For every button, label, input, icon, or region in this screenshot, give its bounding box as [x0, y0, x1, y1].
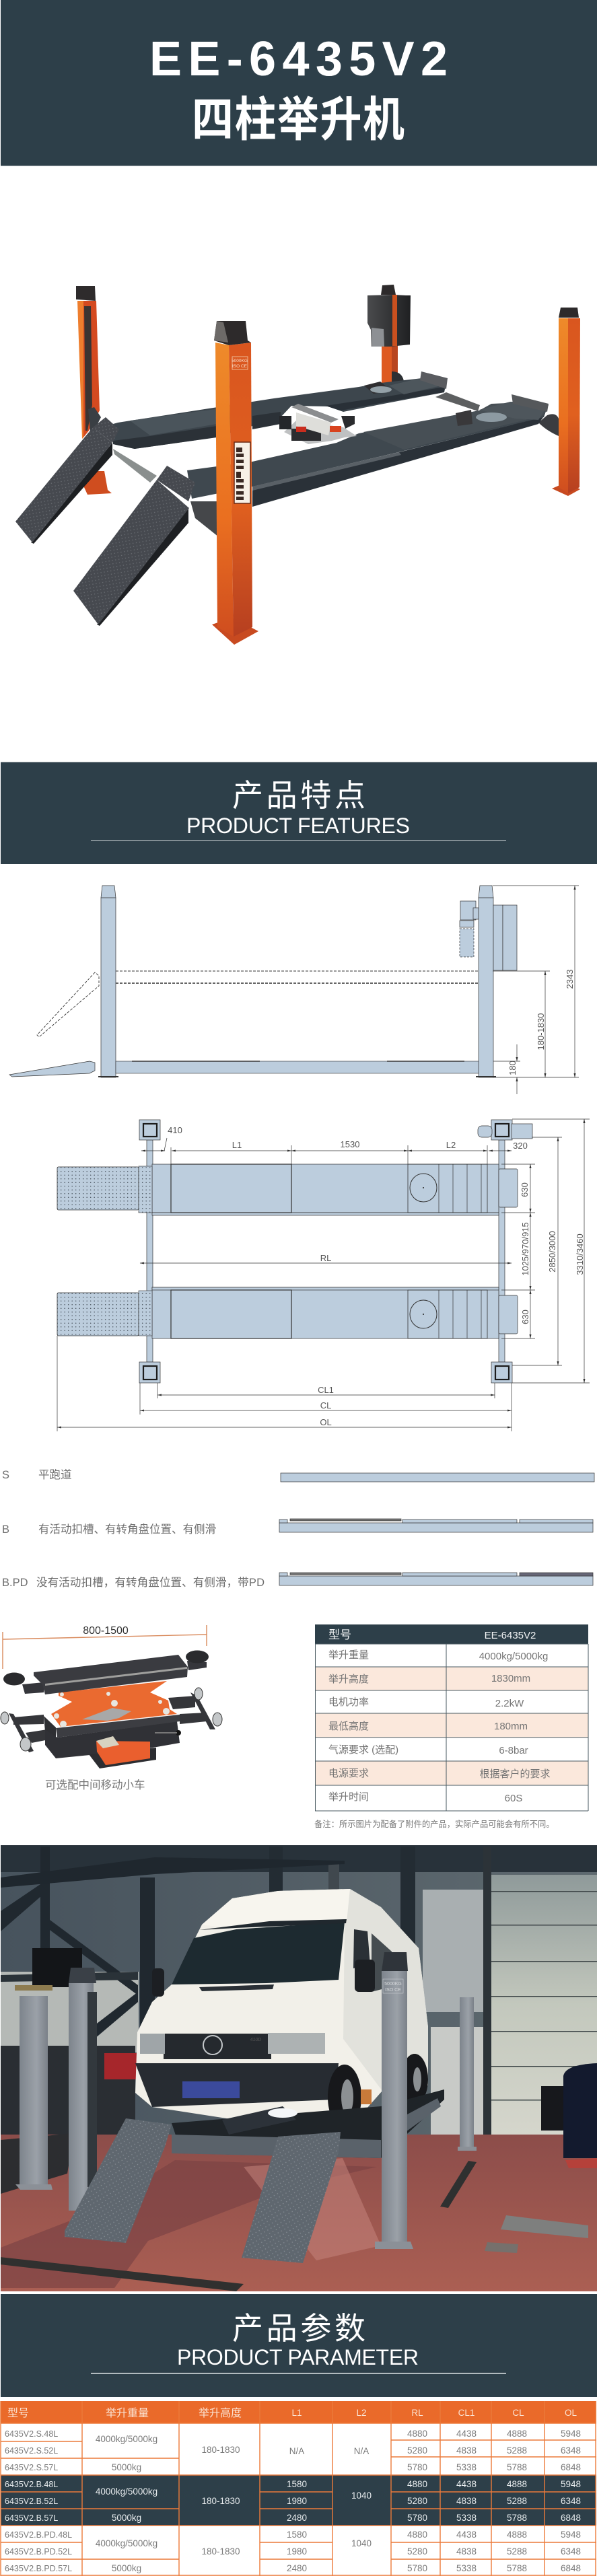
row 6435V2.S.52L: 4838: [456, 2445, 477, 2456]
runway type B: B: [2, 1524, 9, 1536]
merged cells B group: 1040: [351, 2491, 372, 2501]
row 6435V2.B.57L: 2480: [287, 2513, 307, 2523]
row 6435V2.B.57L: 5780: [407, 2513, 427, 2523]
plan dimension labels: L2: [446, 1140, 456, 1150]
trolley caption: 可选配中间移动小车: [45, 1779, 145, 1791]
runway type B: 有活动扣槽、有转角盘位置、有侧滑: [38, 1523, 216, 1536]
grille: [164, 2034, 271, 2059]
table header row: [315, 1624, 588, 1644]
headlights: [140, 2034, 165, 2054]
row 6435V2.S.48L: 4880: [407, 2429, 427, 2439]
heading english: PRODUCT FEATURES: [186, 814, 410, 838]
column base plates: [139, 1120, 512, 1383]
front right post: [538, 308, 580, 496]
row 6435V2.B.PD.48L: 4880: [407, 2530, 427, 2540]
table header: L2: [356, 2408, 367, 2418]
plan dimension labels: 630: [520, 1182, 530, 1197]
wheels: [1, 1688, 222, 1751]
trolley body: [44, 1716, 180, 1768]
rear right post: [458, 1997, 477, 2151]
row 6435V2.B.52L: 1980: [287, 2496, 307, 2506]
row 6435V2.S.48L: 5948: [561, 2429, 581, 2439]
spec: lifting time: [328, 1791, 522, 1804]
spec: lifting weight: 举升重量: [328, 1649, 369, 1661]
front left post: [69, 1968, 97, 2211]
table header: CL1: [458, 2408, 475, 2418]
rear right post with control box: [367, 285, 411, 384]
row 6435V2.S.52L: 5288: [507, 2445, 527, 2456]
plan dimension labels: CL: [320, 1400, 331, 1410]
grid lines: [1, 2401, 596, 2576]
row 6435V2.S.48L: 4888: [507, 2429, 527, 2439]
table header: 型号: [7, 2407, 29, 2419]
merged cells B.PD group: [96, 2538, 372, 2573]
cross beams: [147, 1140, 505, 1362]
row 6435V2.B.PD.52L: 6435V2.B.PD.52L: [5, 2547, 72, 2556]
merged cells B.PD group: 1040: [351, 2538, 372, 2548]
spec: motor power: 电机功率: [328, 1696, 369, 1708]
row 6435V2.B.PD.57L: [5, 2563, 581, 2573]
front left ramp: [65, 2118, 172, 2243]
van windshield: [172, 1922, 345, 1984]
front right ramp: [242, 2132, 341, 2263]
profile B: [279, 1519, 593, 1532]
cross beams: [113, 392, 480, 482]
rear approach ramp: [15, 417, 119, 544]
profile B.PD: [279, 1573, 593, 1585]
row 6435V2.B.57L: 6435V2.B.57L: [5, 2513, 58, 2523]
row 6435V2.B.PD.52L: 5288: [507, 2546, 527, 2556]
lower ramp: [57, 1291, 152, 1336]
spec: lifting time: 举升时间: [328, 1791, 369, 1803]
row 6435V2.B.PD.48L: 1580: [287, 2530, 307, 2540]
row 6435V2.B.52L: 6348: [561, 2496, 581, 2506]
row 6435V2.B.PD.57L: 2480: [287, 2563, 307, 2573]
floor shadow and shapes: [0, 2133, 588, 2291]
spec: motor power: 2.2kW: [495, 1698, 524, 1709]
runway type B.PD: 没有活动扣槽，有转角盘位置、有侧滑，带PD: [36, 1576, 265, 1589]
parameter table: [1, 2401, 596, 2576]
spec: motor power: [328, 1696, 524, 1709]
row 6435V2.S.52L: 6435V2.S.52L: [5, 2446, 58, 2456]
plan dimension labels: CL1: [318, 1385, 334, 1395]
table header row: EE-6435V2: [485, 1630, 536, 1641]
wing mirror: [355, 1960, 375, 1992]
header banner: [1, 0, 597, 166]
merged cells B group: [96, 2486, 372, 2523]
upper ramp: [57, 1166, 152, 1213]
row 6435V2.B.48L: 5948: [561, 2479, 581, 2489]
row 6435V2.B.48L: 1580: [287, 2479, 307, 2489]
upper runway: [152, 1164, 499, 1215]
row 6435V2.S.57L: 6848: [561, 2462, 581, 2472]
row 6435V2.B.52L: 4838: [456, 2496, 477, 2506]
power unit top view: [478, 1124, 532, 1139]
heading english: PRODUCT PARAMETER: [177, 2345, 419, 2369]
left post: [98, 886, 118, 1077]
row 6435V2.S.48L: [5, 2429, 581, 2439]
plan dimension labels: OL: [320, 1417, 332, 1427]
capacity badge: 5000KG: [232, 359, 248, 363]
section header: product features: [1, 762, 597, 864]
heading chinese: 产品特点: [232, 778, 365, 813]
spec: air supply: 气源要求 (选配): [328, 1744, 398, 1756]
van body: [135, 1889, 428, 2133]
row 6435V2.B.52L: [5, 2496, 581, 2506]
plan dimension labels: [168, 1125, 585, 1427]
width dimension: 800-1500: [83, 1625, 129, 1637]
row 6435V2.B.PD.52L: 4838: [456, 2546, 477, 2556]
row 6435V2.B.PD.57L: 5788: [507, 2563, 527, 2573]
spec: minimum height: 最低高度: [328, 1721, 369, 1732]
right post: [476, 886, 496, 1077]
title: model number: EE-6435V2: [149, 32, 448, 86]
row 6435V2.B.PD.48L: 4888: [507, 2530, 527, 2540]
plan dimension labels: 2850/3000: [547, 1231, 557, 1273]
rear left post: [76, 286, 112, 495]
spec: lifting weight: 4000kg/5000kg: [479, 1651, 548, 1662]
spec: lifting time: 60S: [505, 1793, 522, 1804]
ramp lowered: [9, 1061, 95, 1077]
row 6435V2.S.57L: 6435V2.S.57L: [5, 2463, 58, 2472]
spec: minimum height: [328, 1721, 528, 1732]
spec: air supply: 6-8bar: [499, 1745, 528, 1756]
optional mid jack trolley: [1, 1625, 222, 1791]
row 6435V2.B.52L: 5280: [407, 2496, 427, 2506]
row 6435V2.S.57L: [5, 2462, 581, 2472]
license plate: [182, 2081, 240, 2098]
merged cells B.PD group: 180-1830: [201, 2546, 240, 2556]
table header: OL: [565, 2408, 577, 2418]
end plates: [499, 1169, 518, 1334]
workshop photo: van on lift: [0, 1845, 597, 2291]
row 6435V2.B.48L: 4438: [456, 2479, 477, 2489]
merged cells S group: [96, 2434, 369, 2472]
workshop background: [1, 1845, 597, 2141]
lower runway: [152, 1287, 499, 1338]
left monitor: [32, 1948, 82, 1987]
far left post: [15, 1985, 52, 2190]
front right post: [375, 1952, 413, 2249]
row 6435V2.B.52L: 5288: [507, 2496, 527, 2506]
row 6435V2.B.PD.48L: [5, 2530, 581, 2540]
hood vent: [199, 1984, 274, 1991]
row 6435V2.S.57L: 5788: [507, 2462, 527, 2472]
lift platform and lights: [172, 2089, 444, 2158]
specification table: [315, 1624, 588, 1811]
runway raised, dashed: [37, 971, 479, 1037]
product image: four-post lift: [15, 285, 580, 645]
runway lowered: [116, 1061, 479, 1073]
spec: lifting height: 举升高度: [328, 1674, 369, 1685]
merged cells S group: 5000kg: [112, 2462, 141, 2472]
plan dimension labels: 630: [520, 1310, 530, 1324]
row 6435V2.B.PD.52L: 6348: [561, 2546, 581, 2556]
front frame bar: [56, 1715, 180, 1738]
row 6435V2.S.48L: 6435V2.S.48L: [5, 2429, 58, 2439]
dimension 180: 180: [507, 1061, 518, 1075]
table header row: 型号: [328, 1629, 351, 1641]
hydraulic pump: [96, 1730, 181, 1765]
row 6435V2.B.PD.57L: 5338: [456, 2563, 477, 2573]
runway type B.PD: B.PD: [2, 1577, 28, 1589]
merged cells S group: N/A: [354, 2446, 369, 2456]
front approach ramp: [73, 466, 195, 626]
row 6435V2.B.57L: 5788: [507, 2513, 527, 2523]
row 6435V2.S.52L: 6348: [561, 2445, 581, 2456]
row 6435V2.B.48L: [5, 2479, 581, 2489]
tool cart and dark car: [541, 2063, 597, 2168]
plan dimension labels: RL: [320, 1253, 331, 1263]
row 6435V2.B.PD.48L: 4438: [456, 2530, 477, 2540]
row 6435V2.B.48L: 6435V2.B.48L: [5, 2480, 58, 2489]
merged cells B group: 5000kg: [112, 2513, 141, 2523]
capacity badge: [232, 357, 248, 369]
row backgrounds: [316, 1667, 588, 1785]
control cabinet: [493, 905, 517, 970]
runway type S: 平跑道: [38, 1468, 71, 1481]
warning label: [234, 442, 250, 503]
row 6435V2.S.48L: 4438: [456, 2429, 477, 2439]
row 6435V2.B.PD.52L: [5, 2546, 581, 2556]
row 6435V2.B.57L: 6848: [561, 2513, 581, 2523]
spec: air supply: [328, 1744, 528, 1756]
row 6435V2.B.48L: 4880: [407, 2479, 427, 2489]
power unit: [460, 901, 479, 957]
post badge: 5000KG: [384, 1982, 402, 1987]
post badge: ISO CE: [385, 1988, 401, 1993]
roller door: [483, 1847, 597, 2135]
row 6435V2.S.57L: 5780: [407, 2462, 427, 2472]
plan dimension lines: [57, 1119, 590, 1431]
table header: L1: [291, 2408, 302, 2418]
top arm plate: [3, 1650, 209, 1694]
lower frame arms: [9, 1692, 215, 1752]
merged cells B group: 4000kg/5000kg: [96, 2486, 157, 2497]
row 6435V2.S.52L: 5280: [407, 2445, 427, 2456]
front runway: [187, 394, 549, 537]
row 6435V2.B.PD.48L: 5948: [561, 2530, 581, 2540]
wheels: [328, 2065, 361, 2110]
spec: power supply: [328, 1768, 551, 1780]
front left post: [212, 321, 258, 645]
row 6435V2.B.PD.52L: 5280: [407, 2546, 427, 2556]
plan view drawing: [57, 1119, 590, 1431]
row 6435V2.B.57L: 5338: [456, 2513, 477, 2523]
row 6435V2.B.PD.48L: 6435V2.B.PD.48L: [5, 2530, 72, 2540]
row 6435V2.B.48L: 4888: [507, 2479, 527, 2489]
table header: 举升高度: [199, 2407, 242, 2419]
dimension 2343: 2343: [565, 970, 575, 989]
plan dimension labels: 1530: [341, 1139, 359, 1149]
merged cells B group: 180-1830: [201, 2496, 240, 2506]
rear runway: [113, 371, 448, 449]
row 6435V2.B.52L: 6435V2.B.52L: [5, 2497, 58, 2506]
center trolley: [279, 404, 357, 444]
scissor arms: [51, 1681, 177, 1727]
dimension lines: [493, 886, 579, 1094]
spec: lifting height: 1830mm: [491, 1673, 530, 1684]
row 6435V2.S.52L: [5, 2445, 581, 2456]
row 6435V2.B.PD.57L: 6848: [561, 2563, 581, 2573]
post badge: [383, 1979, 403, 1993]
table header: [1, 2401, 596, 2423]
spec: power supply: 根据客户的要求: [479, 1768, 551, 1780]
runway type S: S: [2, 1469, 9, 1481]
side elevation drawing: [9, 886, 579, 1094]
table header: 举升重量: [106, 2407, 149, 2419]
runway type B.PD: [2, 1573, 593, 1589]
merged cells S group: N/A: [289, 2446, 304, 2456]
plan dimension labels: 320: [513, 1141, 528, 1151]
merged cells B.PD group: 5000kg: [112, 2563, 141, 2573]
side windows: [353, 1929, 370, 1968]
spec: power supply: 电源要求: [328, 1768, 369, 1779]
row 6435V2.B.PD.57L: 6435V2.B.PD.57L: [5, 2564, 72, 2573]
plan dimension labels: 1025/970/915: [520, 1222, 530, 1276]
table header: CL: [512, 2408, 524, 2418]
width dimension: [3, 1625, 207, 1669]
epoxy floor: [1, 2135, 597, 2291]
row 6435V2.B.PD.57L: 5780: [407, 2563, 427, 2573]
plan dimension labels: L1: [232, 1140, 242, 1150]
runway type S: [2, 1468, 594, 1482]
plan dimension labels: 3310/3460: [575, 1233, 585, 1275]
row 6435V2.S.57L: 5338: [456, 2462, 477, 2472]
spec: minimum height: 180mm: [494, 1721, 528, 1732]
table header: RL: [411, 2408, 423, 2418]
plan dimension labels: 410: [168, 1125, 182, 1135]
profile S: [281, 1473, 594, 1482]
merged cells S group: 4000kg/5000kg: [96, 2434, 157, 2444]
van model badge: 410D: [250, 2038, 261, 2042]
heading chinese: 产品参数: [232, 2311, 365, 2346]
row 6435V2.B.57L: [5, 2513, 581, 2523]
capacity badge: ISO CE: [232, 364, 248, 369]
merged cells B.PD group: 4000kg/5000kg: [96, 2538, 157, 2548]
table footnote: 备注：所示图片为配备了附件的产品，实际产品可能会有所不同。: [314, 1819, 555, 1829]
merged cells S group: 180-1830: [201, 2445, 240, 2455]
bumper: [135, 2063, 339, 2107]
runway type B: [2, 1519, 593, 1536]
spec: lifting weight: [328, 1649, 548, 1662]
tool cabinet: [104, 2053, 137, 2079]
dark B rows background: [1, 2475, 596, 2526]
spec: lifting height: [328, 1673, 530, 1685]
title: product name: 四柱举升机: [192, 94, 405, 147]
section header: product parameter: [1, 2294, 597, 2397]
row 6435V2.B.PD.52L: 1980: [287, 2546, 307, 2556]
dimension 180-1830: 180-1830: [536, 1013, 546, 1050]
